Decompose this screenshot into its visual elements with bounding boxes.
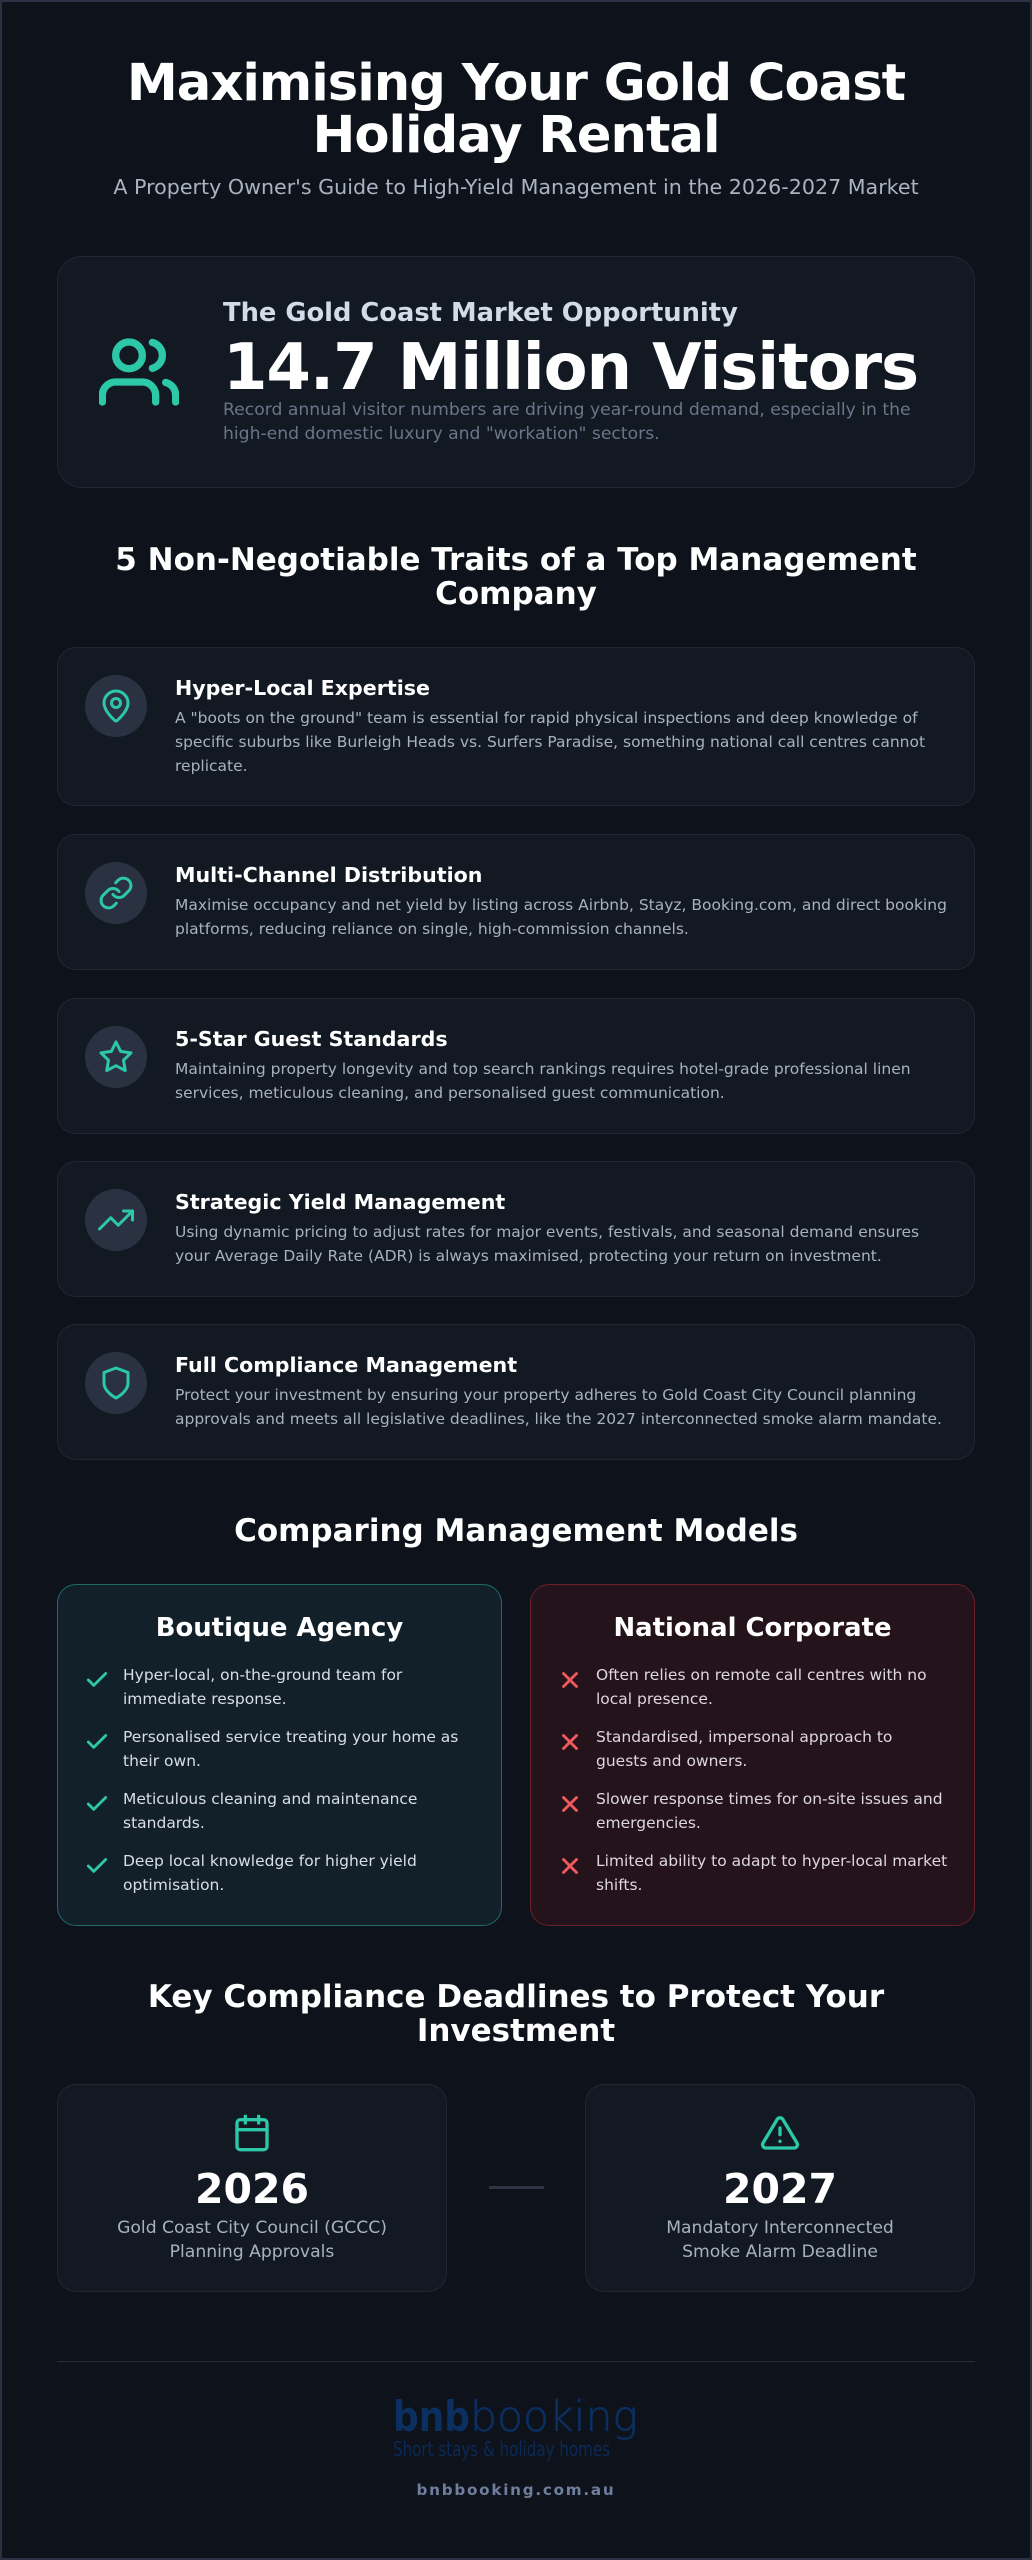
- heading: traits: Company: [435, 576, 597, 612]
- deadline description: Mandatory Interconnected: [666, 2218, 894, 2238]
- panel: 2027 deadline: [585, 2084, 975, 2292]
- item: Meticulous cleaning and maintenance: [123, 1790, 417, 1808]
- trait description: approvals and meets all legislative deadlines, like the 2027 interconnected smoke alarm mandate.: [175, 1410, 942, 1428]
- title: [127, 53, 905, 165]
- visitor statistic: 14.7 Million Visitors: [223, 331, 918, 405]
- trait title: Full Compliance Management: [175, 1353, 517, 1377]
- trait description: Maximise occupancy and net yield by listing across Airbnb, Stayz, Booking.com, and direct booking: [175, 896, 947, 914]
- icon: warning triangle: [760, 2116, 800, 2150]
- heading: deadlines: Key Compliance Deadlines to Protect Your: [148, 1979, 884, 2015]
- deadline description: Gold Coast City Council (GCCC): [117, 2218, 387, 2238]
- item: Deep local knowledge for higher yield: [123, 1852, 417, 1870]
- item: optimisation.: [123, 1876, 224, 1894]
- trait description: Maintaining property longevity and top search rankings requires hotel-grade professional linen: [175, 1060, 911, 1078]
- item: [562, 1666, 927, 1708]
- trait title: Strategic Yield Management: [175, 1190, 505, 1214]
- trait title: 5-Star Guest Standards: [175, 1027, 448, 1051]
- heading: deadlines: Investment: [417, 2013, 615, 2049]
- item: [86, 1666, 402, 1708]
- deadline description: [666, 2218, 894, 2262]
- item: Standardised, impersonal approach to: [596, 1728, 892, 1746]
- heading: comparison: Comparing Management Models: [234, 1513, 798, 1549]
- item: standards.: [123, 1814, 205, 1832]
- market description: [223, 400, 911, 444]
- icon: map pin: [85, 675, 147, 737]
- deadline description: [117, 2218, 387, 2262]
- trait description: [175, 1223, 919, 1265]
- panel: multi-channel distribution: [57, 834, 975, 970]
- deadline description: Planning Approvals: [170, 2242, 334, 2262]
- subtitle: A Property Owner's Guide to High-Yield Management in the 2026-2027 Market: [113, 175, 919, 199]
- item: emergencies.: [596, 1814, 701, 1832]
- item: guests and owners.: [596, 1752, 747, 1770]
- icon: trending up: [85, 1189, 147, 1251]
- website url: bnbbooking.com.au: [417, 2481, 615, 2499]
- item: [562, 1790, 943, 1832]
- item: local presence.: [596, 1690, 713, 1708]
- trait description: [175, 896, 947, 938]
- trait description: Using dynamic pricing to adjust rates for major events, festivals, and seasonal demand ensures: [175, 1223, 919, 1241]
- panel: boutique agency: [57, 1584, 502, 1926]
- trait description: Protect your investment by ensuring your property adheres to Gold Coast City Council planning: [175, 1386, 916, 1404]
- item: their own.: [123, 1752, 201, 1770]
- icon: calendar: [235, 2114, 269, 2152]
- year: 2027: [723, 2165, 837, 2213]
- item: Often relies on remote call centres with no: [596, 1666, 927, 1684]
- icon: link: [85, 862, 147, 924]
- corporate heading: National Corporate: [613, 1612, 892, 1642]
- trait description: replicate.: [175, 757, 248, 775]
- trait description: your Average Daily Rate (ADR) is always maximised, protecting your return on investment.: [175, 1247, 882, 1265]
- panel: 2026 deadline: [57, 2084, 447, 2292]
- item: [86, 1852, 417, 1894]
- trait description: [175, 1060, 911, 1102]
- item: shifts.: [596, 1876, 642, 1894]
- panel: guest standards: [57, 998, 975, 1134]
- item: Hyper-local, on-the-ground team for: [123, 1666, 402, 1684]
- panel: national corporate: [530, 1584, 975, 1926]
- item: [86, 1728, 458, 1770]
- item: [562, 1852, 947, 1894]
- heading: deadlines: [148, 1979, 884, 2049]
- item: [86, 1790, 417, 1832]
- panel: compliance management: [57, 1324, 975, 1460]
- panel: hyper-local expertise: [57, 647, 975, 806]
- item: Limited ability to adapt to hyper-local market: [596, 1852, 947, 1870]
- connector: [489, 2186, 544, 2189]
- year: 2026: [195, 2165, 309, 2213]
- market description: high-end domestic luxury and "workation" sectors.: [223, 424, 660, 444]
- item: Slower response times for on-site issues and: [596, 1790, 943, 1808]
- item: Personalised service treating your home as: [123, 1728, 458, 1746]
- item: [562, 1728, 892, 1770]
- trait description: [175, 709, 925, 775]
- logo: bnb: [393, 2392, 470, 2441]
- trait description: A "boots on the ground" team is essential for rapid physical inspections and deep knowledge of: [175, 709, 918, 727]
- trait description: specific suburbs like Burleigh Heads vs. Surfers Paradise, something national call centres cannot: [175, 733, 925, 751]
- icon: star: [85, 1026, 147, 1088]
- item: immediate response.: [123, 1690, 287, 1708]
- trait description: [175, 1386, 942, 1428]
- boutique heading: Boutique Agency: [156, 1612, 403, 1642]
- title: Maximising Your Gold Coast: [127, 53, 905, 113]
- trait title: Multi-Channel Distribution: [175, 863, 482, 887]
- panel: yield management: [57, 1161, 975, 1297]
- deadline description: Smoke Alarm Deadline: [682, 2242, 878, 2262]
- logo: [393, 2392, 638, 2461]
- market description: Record annual visitor numbers are driving year-round demand, especially in the: [223, 400, 911, 420]
- trait description: platforms, reducing reliance on single, high-commission channels.: [175, 920, 689, 938]
- panel: market opportunity: [57, 256, 975, 488]
- title: Holiday Rental: [312, 105, 720, 165]
- heading: traits: 5 Non-Negotiable Traits of a Top Management: [115, 542, 917, 578]
- trait title: Hyper-Local Expertise: [175, 676, 430, 700]
- trait description: services, meticulous cleaning, and personalised guest communication.: [175, 1084, 725, 1102]
- market heading: The Gold Coast Market Opportunity: [223, 298, 738, 328]
- icon: users: [99, 338, 179, 406]
- icon: shield: [85, 1352, 147, 1414]
- heading: traits: [115, 542, 917, 612]
- logo: booking: [470, 2392, 638, 2441]
